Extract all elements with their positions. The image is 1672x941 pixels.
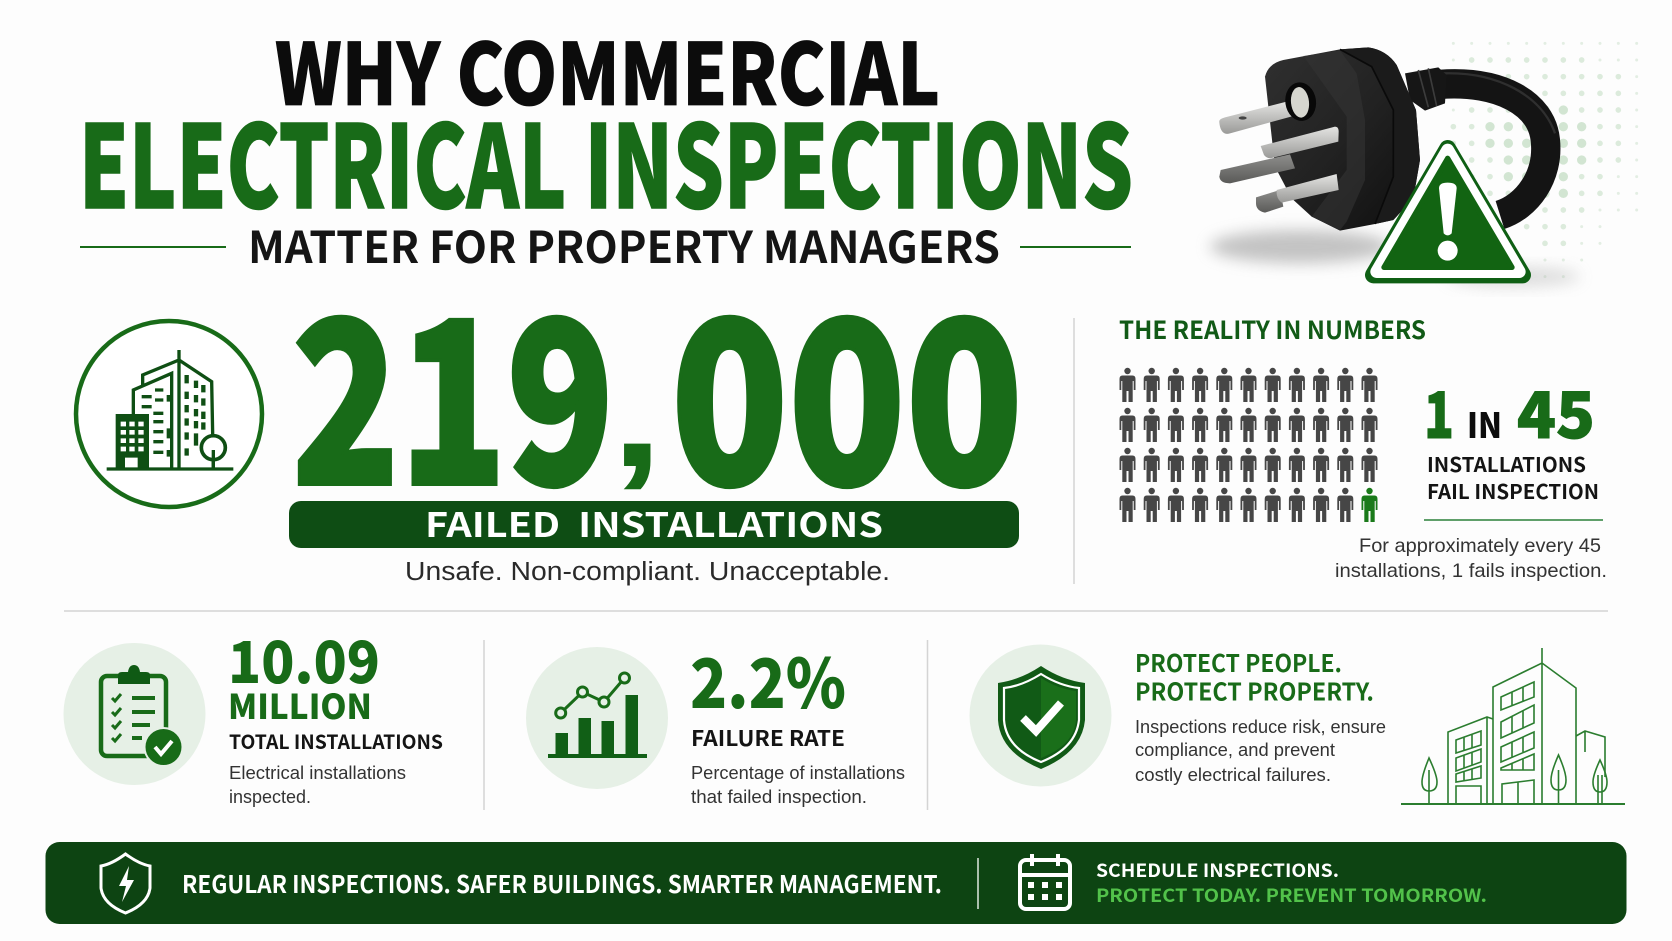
panel: total installations: inspected. [229, 786, 311, 807]
pictogram: 44 people, one highlighted [1120, 368, 1378, 522]
panel: protect people: PROTECT PROPERTY. [1135, 674, 1374, 708]
footer banner [46, 842, 1626, 924]
stat: 1 in 45 [1424, 365, 1603, 520]
big number [292, 223, 1023, 550]
panel: the reality in numbers [1119, 311, 1607, 582]
stat: 1 in 45: IN [1467, 398, 1502, 449]
stat: 1 in 45: FAIL INSPECTION [1427, 475, 1599, 505]
panel: failure rate [526, 629, 905, 807]
icon: shield with bolt [101, 854, 150, 913]
icon: shield [970, 644, 1112, 786]
big number: 000 [671, 223, 1023, 550]
banner: failed installations: FAILED INSTALLATIONS [425, 498, 883, 547]
icon: chart [526, 647, 668, 789]
panel: failure rate: that failed inspection. [691, 786, 867, 807]
icon: clipboard checklist [64, 643, 206, 785]
stat: 1 in 45: 1 [1424, 365, 1454, 457]
title [79, 7, 1133, 276]
panel: total installations: TOTAL INSTALLATIONS [229, 726, 443, 755]
footer banner: PROTECT TODAY. PREVENT TOMORROW. [1096, 882, 1487, 908]
panel: protect people [970, 644, 1386, 786]
value: 10.09 [228, 616, 380, 700]
stat: 1 in 45: INSTALLATIONS [1427, 448, 1586, 478]
title: WHY COMMERCIAL [275, 7, 940, 130]
icon: calendar [1020, 854, 1070, 909]
note [1335, 535, 1607, 582]
value: 2.2% [690, 629, 846, 728]
panel: protect people: compliance, and prevent [1135, 739, 1335, 760]
panel: failure rate: FAILURE RATE [691, 722, 845, 753]
panel: total installations: MILLION [228, 680, 372, 729]
title: ELECTRICAL INSPECTIONS [79, 76, 1133, 241]
icon: office building in ring [76, 321, 262, 507]
body: Inspections reduce risk, ensure [1135, 716, 1386, 737]
note: For approximately every 45 [1359, 535, 1601, 557]
icon: electrical plug with warning triangle [1210, 43, 1655, 287]
title: MATTER FOR PROPERTY MANAGERS [248, 212, 1000, 276]
icon: outline buildings [1401, 648, 1625, 804]
heading: THE REALITY IN NUMBERS [1119, 311, 1426, 347]
panel: protect people: costly electrical failures. [1135, 764, 1331, 785]
call to action: SCHEDULE INSPECTIONS. [1096, 857, 1339, 883]
heading: PROTECT PEOPLE. [1135, 645, 1342, 680]
banner: failed installations [289, 498, 1019, 548]
big number: 219 [292, 223, 614, 550]
panel: total installations: Electrical installations [229, 762, 406, 783]
big number: , [611, 330, 663, 498]
slogan: REGULAR INSPECTIONS. SAFER BUILDINGS. SMARTER MANAGEMENT. [182, 866, 942, 901]
tagline: Unsafe. Non-compliant. Unacceptable. [405, 558, 890, 586]
panel: total installations [64, 616, 443, 807]
stat: 1 in 45: 45 [1517, 365, 1595, 457]
note: installations, 1 fails inspection. [1335, 560, 1607, 582]
panel: failure rate: Percentage of installations [691, 762, 905, 783]
